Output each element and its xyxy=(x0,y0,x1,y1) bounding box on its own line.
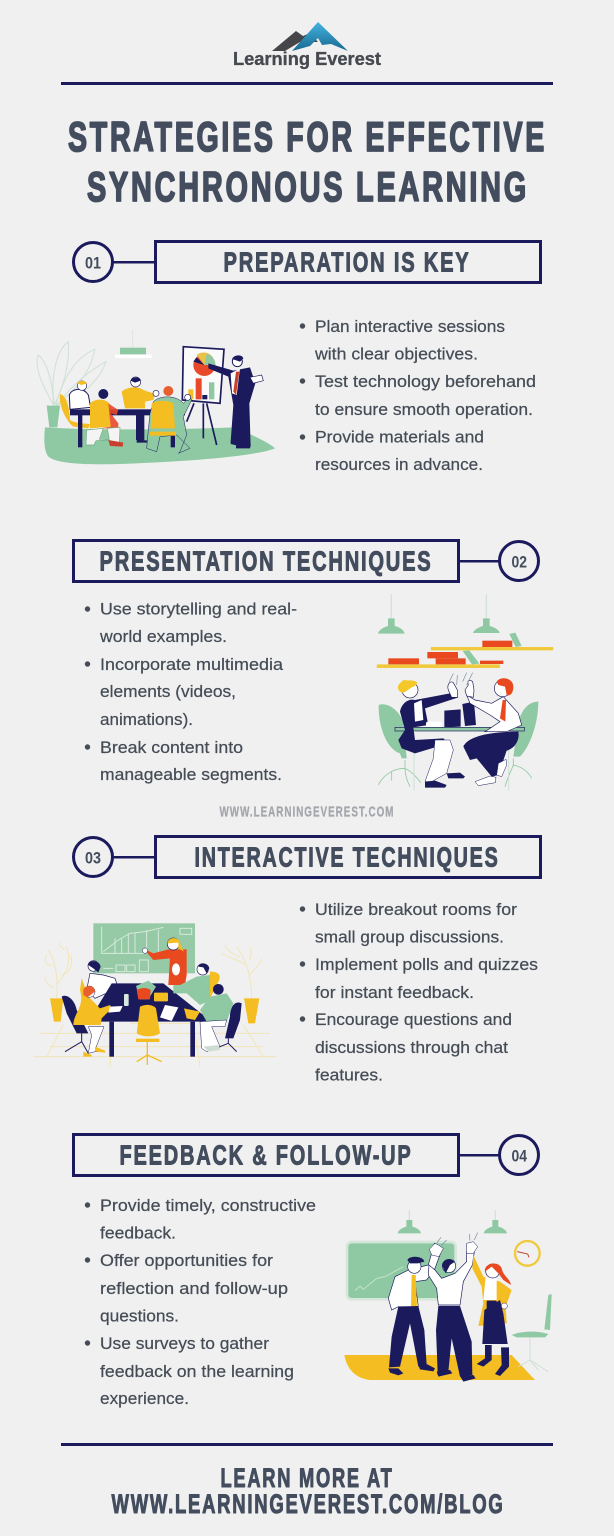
call to action xyxy=(112,1463,504,1519)
section 1 bullet list: Plan interactive sessions xyxy=(315,318,505,336)
section 3 header: Interactive techniques: 03 xyxy=(85,848,101,868)
section 4 bullet list xyxy=(85,1197,316,1408)
section 2 bullet list: world examples. xyxy=(99,628,227,646)
section 1 header: Preparation is key xyxy=(74,242,540,282)
section 3 bullet list xyxy=(300,901,538,1084)
section 4 bullet list: questions. xyxy=(100,1308,179,1326)
section 1 bullet list: with clear objectives. xyxy=(314,346,478,364)
section 1 bullet list: Test technology beforehand xyxy=(315,373,536,391)
section 2 bullet list: Use storytelling and real- xyxy=(100,600,297,618)
section 2 bullet list xyxy=(85,600,297,784)
section 3 bullet list: Utilize breakout rooms for xyxy=(315,901,518,919)
section 3 bullet list: Encourage questions and xyxy=(315,1011,512,1029)
section 3 bullet list: small group discussions. xyxy=(315,928,504,946)
section 4 bullet list: Use surveys to gather xyxy=(100,1335,270,1353)
section 1 header: Preparation is key: PREPARATION IS KEY xyxy=(224,246,470,278)
section 1 bullet list: to ensure smooth operation. xyxy=(315,401,533,419)
illustration: team around conference table xyxy=(33,923,277,1067)
section 2 header: Presentation techniques xyxy=(74,540,538,582)
section 1 bullet list: Provide materials and xyxy=(315,428,484,446)
section 4 bullet list: feedback. xyxy=(100,1224,176,1242)
section 4 bullet list: Offer opportunities for xyxy=(100,1252,274,1270)
section 1 bullet list xyxy=(300,318,536,474)
section 4 header: Feedback and follow-up: FEEDBACK & FOLLOW-UP xyxy=(120,1140,412,1170)
section 1 header: Preparation is key: 01 xyxy=(85,254,101,272)
section 2 header: Presentation techniques: PRESENTATION TECHNIQUES xyxy=(100,546,432,576)
illustration: three colleagues celebrating xyxy=(344,1210,552,1382)
section 4 header: Feedback and follow-up: 04 xyxy=(512,1146,527,1166)
logo: Learning Everest: Learning Everest xyxy=(233,48,381,69)
section 2 bullet list: animations). xyxy=(100,711,193,729)
illustration: meeting with flip chart presenter xyxy=(37,330,275,464)
section 2 header: Presentation techniques: 02 xyxy=(512,552,527,572)
section 3 header: Interactive techniques xyxy=(74,836,540,878)
website watermark: WWW.LEARNINGEVEREST.COM xyxy=(220,804,394,820)
logo: Learning Everest xyxy=(233,22,381,69)
section 4 bullet list: reflection and follow-up xyxy=(100,1280,288,1298)
section 3 bullet list: discussions through chat xyxy=(315,1039,508,1057)
section 4 header: Feedback and follow-up xyxy=(74,1134,538,1176)
section 3 bullet list: Implement polls and quizzes xyxy=(315,956,538,974)
illustration: colleagues high-five at desk xyxy=(377,594,553,790)
section 3 bullet list: for instant feedback. xyxy=(315,984,474,1002)
section 2 bullet list: Incorporate multimedia xyxy=(100,656,284,674)
section 2 bullet list: Break content into xyxy=(100,739,243,757)
title xyxy=(68,113,547,210)
call to action: LEARN MORE AT xyxy=(220,1463,394,1493)
section 4 bullet list: feedback on the learning xyxy=(100,1363,294,1381)
section 4 bullet list: experience. xyxy=(100,1390,189,1408)
section 2 bullet list: manageable segments. xyxy=(100,766,282,784)
section 2 bullet list: elements (videos, xyxy=(100,683,236,701)
section 4 bullet list: Provide timely, constructive xyxy=(100,1197,316,1215)
section 3 bullet list: features. xyxy=(315,1066,383,1084)
section 1 bullet list: resources in advance. xyxy=(315,456,483,474)
